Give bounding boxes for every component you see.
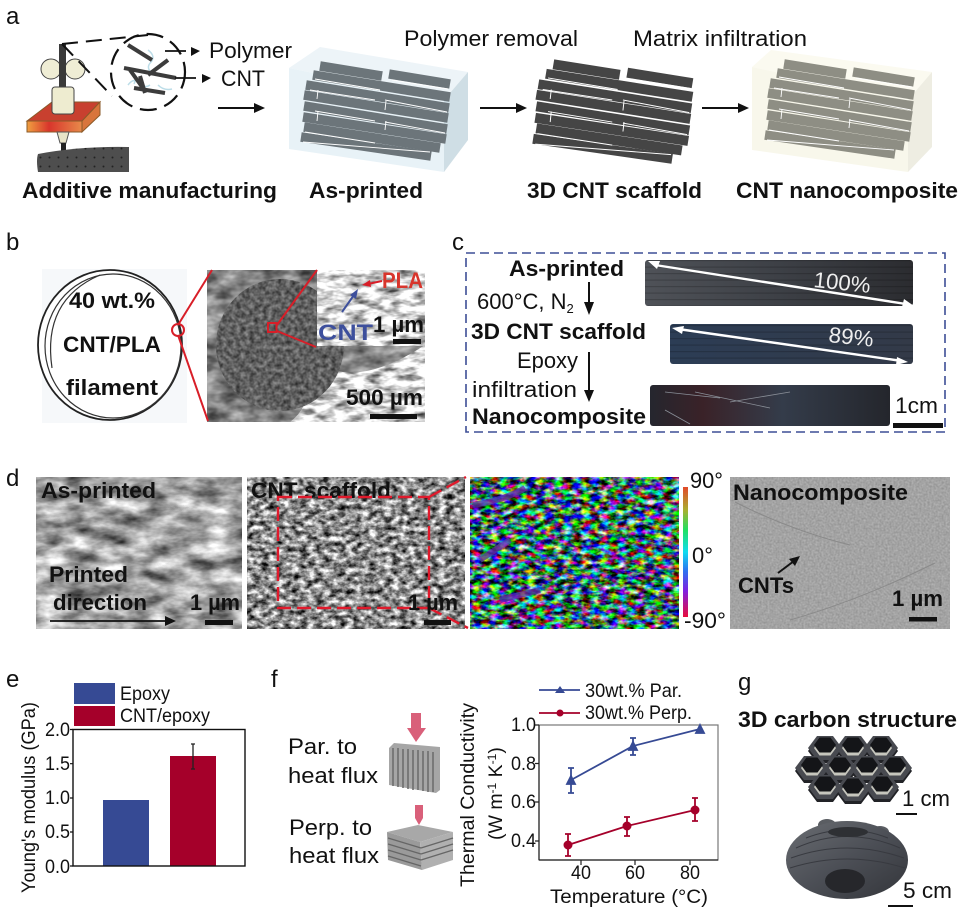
sample: nanocomposite [650,385,890,426]
polymer arrow [165,47,200,56]
label: Nanocomposite: Nanocomposite [472,404,646,429]
orientation colour map [470,477,679,629]
legend: Epoxy [120,683,170,705]
colour bar: 0° [692,543,713,568]
panel letter g: g [738,669,751,696]
legend [539,680,692,724]
panel g: 3D carbon structures [738,669,957,907]
scale bar 5 cm [888,878,952,907]
label: CNT scaffold: CNT scaffold [251,478,391,503]
label: Printed direction [49,562,147,615]
bar chart: 2.0 [45,719,70,741]
y axis units: ) [485,747,507,754]
label: As-printed: As-printed [309,178,423,203]
arrow to nanocomposite [702,103,749,113]
label: 40 wt.%: 40 wt.% [69,288,155,313]
colour bar: 90° [690,468,723,493]
legend: 30wt.% Perp. [585,702,692,724]
sample: as-printed [645,260,914,307]
label: Perp. to heat flux: Perp. to [289,815,372,840]
legend [74,683,210,727]
scale bar 1 µm: 1 µm [190,590,240,615]
label: 3D CNT scaffold: 3D CNT scaffold [471,319,646,344]
label: Nanocomposite: Nanocomposite [733,480,908,505]
y axis units: K [485,764,507,783]
line chart: 0.4 [511,830,536,852]
label: infiltration: infiltration [472,377,577,402]
label: As-printed: As-printed [41,478,156,503]
SEM: CNT scaffold [247,477,465,629]
scale bar 1 µm: 1 µm [408,590,458,615]
panel d: SEM micrographs [6,465,950,633]
y axis title: Thermal Conductivity: Thermal Conductivity [457,703,479,887]
label: PLA with arrow: PLA [382,268,423,293]
label: As-printed: As-printed [509,256,624,281]
magnified CNT and polymer view [62,34,185,110]
panel b: filament and cross section [6,229,425,423]
colour bar: -90° [684,608,726,633]
y axis units: -1 [485,782,499,793]
scale bar 500 µm: 500 µm [346,385,423,410]
SEM: as-printed [36,477,242,629]
label: Printed direction: Printed [49,562,128,587]
line chart: 1.0 [511,714,536,736]
arrow down [584,352,594,402]
SEM: nanocomposite [730,477,950,629]
label: 89%: 89% [827,322,875,352]
label: filament: filament [66,375,159,400]
SEM cross section [207,270,425,422]
arrow to as-printed [218,103,265,113]
legend: 30wt.% Par. [585,680,682,702]
label: CNTs with arrow: CNTs [738,573,794,598]
series: parallel [567,725,704,793]
label: CNT nanocomposite: CNT nanocomposite [736,178,958,203]
line chart [511,714,718,884]
bar chart: 0.5 [45,821,70,843]
label: Epoxy: Epoxy [517,348,578,373]
bar chart: 1.0 [45,787,70,809]
bar chart: 1.5 [45,753,70,775]
scale bar 1 µm [892,586,943,622]
scale bar 1 µm: 1 µm [373,312,424,337]
panel letter d: d [6,465,19,492]
x axis title: Temperature (°C) [550,886,708,908]
icon: parallel channels with arrow [389,713,440,793]
line chart: 0.6 [511,791,536,813]
scale bar 1 cm: 1 cm [902,786,950,811]
label: PLA with arrow [362,268,423,293]
colour bar [683,468,726,633]
scale bar 1cm [893,393,943,428]
icon: extrusion 3D printer [27,44,129,172]
heading: 3D carbon structure [738,707,957,732]
honeycomb structure photo [795,736,912,804]
line chart: 60 [625,862,645,884]
y axis units: (W m [485,793,507,840]
label: Par. to heat flux: heat flux [288,763,378,788]
y axis title: Young's modulus (GPa) [18,702,40,893]
label: 100%: 100% [812,267,872,298]
nanocomposite block [752,50,932,172]
series: perpendicular [564,798,699,856]
dashed frame [466,253,945,432]
printed carbon vessel photo [786,819,908,899]
line chart: 80 [680,862,700,884]
arrow down [584,282,594,315]
y axis units: -1 [485,753,499,764]
icon: perpendicular channels with arrow [387,805,453,870]
panel letter a: a [6,3,20,30]
label: Polymer removal: Polymer removal [404,26,578,51]
label: 600°C, N2: 2 [567,301,574,316]
label: Par. to heat flux [288,734,378,788]
label: CNT with arrow: CNT [318,320,374,345]
label: CNTs with arrow [738,556,800,598]
arrow to scaffold [480,103,527,113]
scaffold rods [533,64,692,159]
bar chart: 0.0 [45,856,70,878]
scale bar 1cm: 1cm [895,393,938,418]
label: Polymer: Polymer [209,38,292,63]
label: Matrix infiltration: Matrix infiltration [633,26,807,51]
CNT arrow [175,74,211,83]
label: CNT with arrow [318,289,374,345]
as-printed block [289,47,468,172]
panel letter c: c [452,229,464,256]
arrow: printed direction [50,616,176,626]
panel letter f: f [271,666,278,693]
scale bar 5 cm: 5 cm [903,878,952,903]
label: CNT: CNT [221,66,265,91]
filament photo [38,269,187,423]
label: Par. to heat flux: Par. to [288,734,357,759]
label: 3D CNT scaffold: 3D CNT scaffold [527,178,702,203]
line chart: 0.8 [511,753,536,775]
bar chart [45,719,245,878]
red dashed zoom box [278,477,468,628]
red zoom lines [172,270,317,421]
panel letter e: e [6,666,19,693]
panel a: fabrication process [6,3,958,203]
label: Printed direction: direction [53,590,147,615]
panel f: thermal conductivity [271,666,718,908]
panel c: sample shrinkage [452,229,945,432]
sample: scaffold [670,324,913,365]
legend: CNT/epoxy [120,705,210,727]
label: Perp. to heat flux [289,815,379,868]
panel letter b: b [6,229,19,256]
scale bar 1 µm: 1 µm [892,586,943,611]
label: Perp. to heat flux: heat flux [289,843,379,868]
label: Additive manufacturing: Additive manufacturing [22,178,277,203]
label: 600°C, N2: 600°C, N [477,289,567,314]
panel e: Young's modulus chart [6,666,245,893]
line chart: 40 [571,862,591,884]
label: CNT/PLA: CNT/PLA [63,332,161,357]
